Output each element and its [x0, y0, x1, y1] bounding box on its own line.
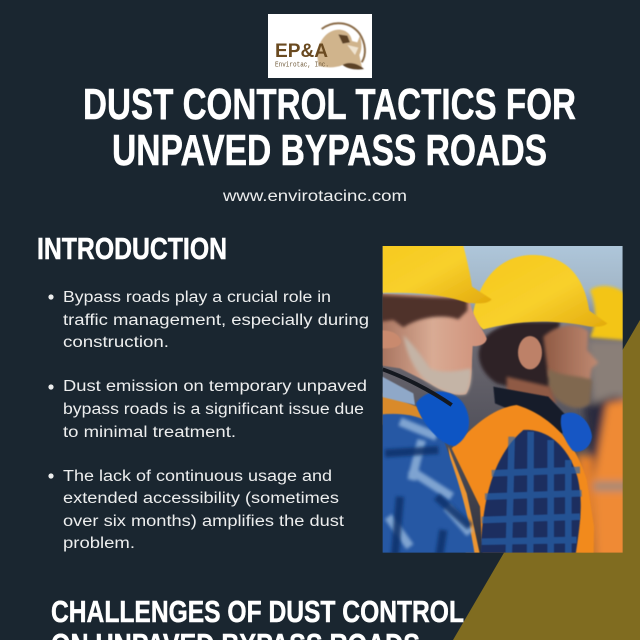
bullet 2: to minimal treatment.	[63, 424, 236, 441]
bullet 1: Bypass roads play a crucial role in	[63, 289, 331, 306]
heading: challenges of dust control	[51, 595, 464, 640]
heading: introduction: INTRODUCTION	[37, 232, 227, 266]
front worker ear defenders	[416, 391, 469, 446]
title	[83, 80, 576, 175]
middle worker ear defenders	[561, 413, 592, 452]
background: gold diagonal shape	[453, 320, 640, 640]
logo tagline: Envirotac, Inc.	[275, 62, 329, 70]
bullet 2: Dust emission on temporary unpaved	[63, 378, 367, 395]
bullet 2: bypass roads is a significant issue due	[63, 401, 364, 418]
logo	[268, 14, 372, 78]
bullet 1	[48, 289, 369, 351]
text block: introduction bullets	[48, 289, 369, 552]
bullet 3: extended accessibility (sometimes	[63, 490, 339, 507]
bullet 1: traffic management, especially during	[63, 312, 369, 329]
icon: rhino	[317, 23, 365, 69]
logo wordmark: EP&A	[275, 40, 328, 62]
front worker	[367, 293, 487, 573]
far worker hard hat	[588, 284, 623, 342]
heading: challenges of dust control: CHALLENGES OF DUST CONTROL	[51, 595, 464, 629]
far worker	[575, 338, 623, 553]
bullet 3: problem.	[63, 535, 135, 552]
bullet 1: construction.	[63, 334, 169, 351]
middle worker	[452, 322, 598, 573]
bullet 3: The lack of continuous usage and	[63, 468, 332, 485]
website url: www.envirotacinc.com	[222, 188, 407, 205]
middle worker hard hat	[473, 255, 607, 329]
photo: construction workers in hard hats	[382, 246, 623, 553]
bullet 2	[48, 378, 367, 441]
front worker hard hat	[382, 246, 492, 304]
bullet 3	[48, 468, 345, 552]
bullet 3: over six months) amplifies the dust	[63, 513, 345, 530]
